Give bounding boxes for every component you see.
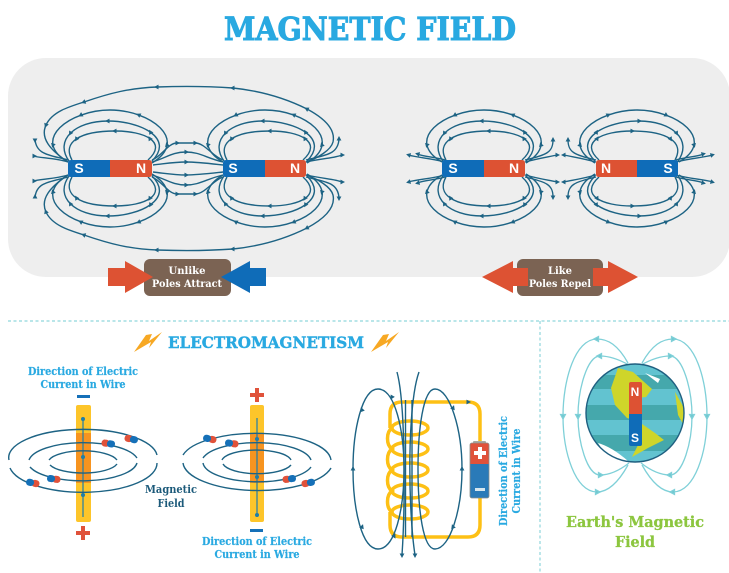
magnet: earth N S: S xyxy=(631,431,639,445)
callout: like poles repel xyxy=(482,259,638,296)
arrow: red attract xyxy=(108,261,153,293)
magnet: S N left xyxy=(68,160,152,177)
label: current direction vertical: Direction of Electric xyxy=(497,416,510,526)
left wire diagram xyxy=(9,365,157,540)
label: magnetic field: Field xyxy=(158,497,185,510)
like poles left field lines xyxy=(405,110,560,227)
magnet: earth N S xyxy=(629,382,642,446)
label: magnetic field: Magnetic xyxy=(145,483,197,496)
coil field lines xyxy=(351,372,464,558)
magnet: N S: S xyxy=(663,160,673,176)
callout: like poles repel: Like xyxy=(548,265,572,277)
callout: unlike poles attract xyxy=(108,259,266,296)
coil wire xyxy=(388,402,480,537)
magnet: S N right xyxy=(223,160,306,177)
plus sign xyxy=(76,526,90,540)
field rings xyxy=(183,433,331,491)
magnet: N S xyxy=(596,160,678,177)
coil diagram xyxy=(351,372,523,558)
label: earth's magnetic field: Earth's Magnetic xyxy=(566,513,704,531)
unlike poles magnetic field lines xyxy=(32,85,345,252)
heading: electromagnetism: ELECTROMAGNETISM xyxy=(168,333,364,352)
magnet: S N left: S xyxy=(74,160,84,176)
outer enclosing field line xyxy=(43,85,333,252)
earth globe xyxy=(580,364,690,462)
left magnet loops xyxy=(50,110,170,227)
minus sign xyxy=(250,529,263,532)
callout: like poles repel: Poles Repel xyxy=(529,278,591,290)
label: current direction xyxy=(202,535,312,561)
magnet: S N right: N xyxy=(290,160,300,176)
magnet: earth N S: N xyxy=(631,385,639,399)
wire xyxy=(76,405,91,522)
label: current direction xyxy=(28,365,138,391)
title: MAGNETIC FIELD xyxy=(224,10,516,48)
like poles right field lines xyxy=(561,110,716,227)
panel: magnets background xyxy=(8,58,729,277)
icon: bolt left xyxy=(134,332,162,352)
label: current direction: Direction of Electric xyxy=(202,535,312,548)
magnet: S N: S xyxy=(448,160,458,176)
label: current direction: Current in Wire xyxy=(40,378,126,391)
label: current direction vertical xyxy=(497,416,523,526)
magnet: S N: N xyxy=(509,160,519,176)
right magnet loops xyxy=(205,110,325,227)
callout: unlike poles attract: Poles Attract xyxy=(152,278,222,290)
magnet: S N xyxy=(442,160,525,177)
battery xyxy=(470,441,489,498)
minus sign xyxy=(77,395,90,398)
arrow: red repel left xyxy=(482,261,528,293)
label: magnetic field xyxy=(145,483,197,510)
magnet: S N right: S xyxy=(228,160,238,176)
field rings xyxy=(9,429,157,492)
label: earth's magnetic field: Field xyxy=(615,533,655,551)
label: current direction: Direction of Electric xyxy=(28,365,138,378)
arrow: red repel right xyxy=(593,261,638,293)
label: earth's magnetic field xyxy=(566,513,704,551)
callout: unlike poles attract: Unlike xyxy=(168,265,206,277)
middle field lines xyxy=(152,141,223,196)
wire xyxy=(250,405,264,522)
icon: bolt right xyxy=(371,332,399,352)
label: current direction: Current in Wire xyxy=(214,548,300,561)
magnet: N S: N xyxy=(601,160,611,176)
plus sign xyxy=(250,388,264,402)
right wire diagram xyxy=(183,388,331,561)
magnet: S N left: N xyxy=(136,160,146,176)
earth field lines xyxy=(561,337,709,494)
arrow: blue attract xyxy=(221,261,266,293)
outer side lines xyxy=(32,136,345,201)
label: current direction vertical: Current in Wire xyxy=(510,428,523,514)
